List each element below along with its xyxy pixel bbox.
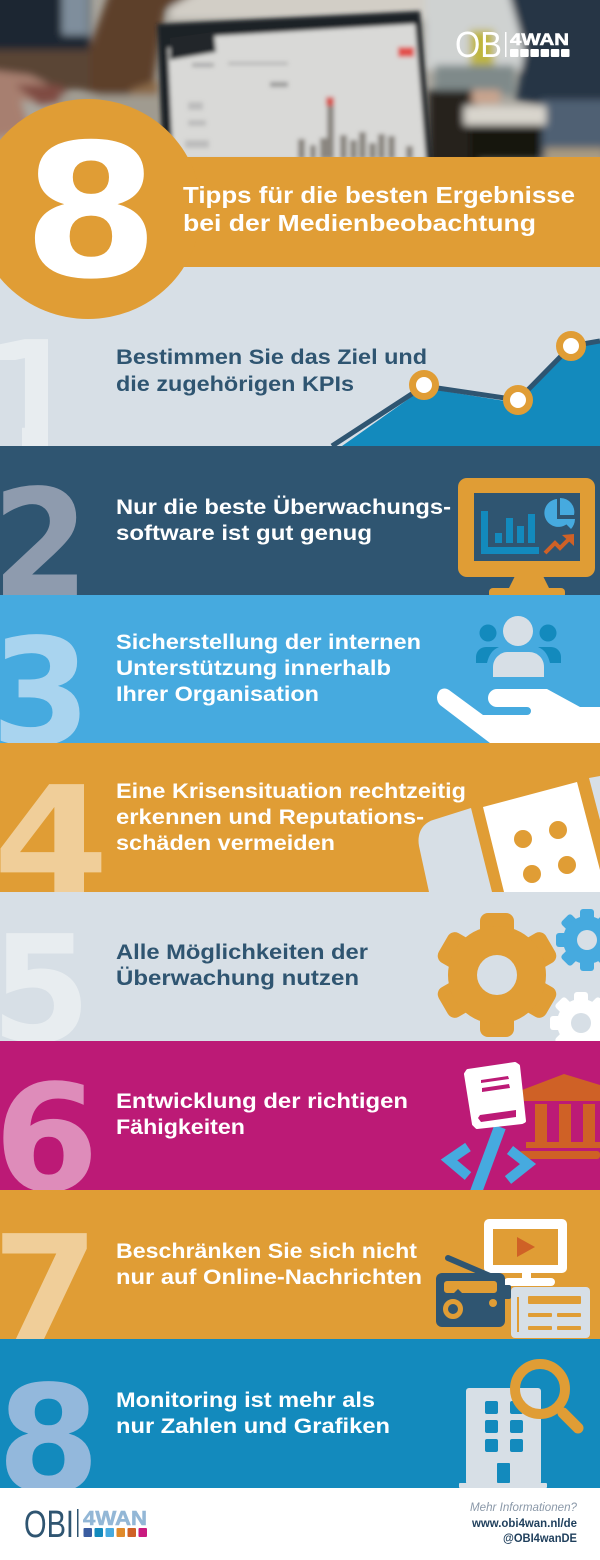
panel: step 2 — [0, 446, 600, 595]
heading: step 8: nur Zahlen und Grafiken — [116, 1415, 390, 1438]
contact text: www.obi4wan.nl/de — [471, 1518, 577, 1530]
icon: large orange gear — [435, 913, 559, 1037]
heading: step 2: software ist gut genug — [116, 522, 372, 545]
heading: step 4: Eine Krisensituation rechtzeitig — [116, 780, 466, 803]
logo: OBI4WAN white — [455, 24, 570, 65]
heading: step 8: Monitoring ist mehr als — [116, 1389, 375, 1412]
logo: OBI4WAN white: 4WAN — [510, 30, 569, 49]
panel: step 8 — [0, 1339, 600, 1488]
heading: step 4: erkennen und Reputations- — [116, 806, 424, 829]
contact text: Mehr Informationen? — [470, 1502, 578, 1514]
icon: office building — [459, 1388, 547, 1488]
big orange circle — [0, 99, 201, 319]
heading: step 6: Entwicklung der richtigen — [116, 1090, 408, 1113]
icon: bank building — [519, 1074, 600, 1159]
heading: step 3: Sicherstellung der internen — [116, 631, 421, 654]
icon: magnifying glass — [515, 1364, 578, 1428]
heading: step 6: Fähigkeiten — [116, 1116, 245, 1139]
icon: people group — [476, 616, 561, 677]
heading: step 3: Ihrer Organisation — [116, 683, 319, 706]
large numeral 8: 8 — [23, 104, 159, 320]
contact text — [470, 1502, 578, 1545]
heading: step 1: Bestimmen Sie das Ziel und — [116, 346, 427, 369]
icon: white gear — [550, 992, 600, 1041]
icon: line chart — [332, 334, 600, 446]
heading: step 5: Alle Möglichkeiten der — [116, 941, 368, 964]
panel: step 6 — [0, 1041, 600, 1190]
panel: step 7 — [0, 1190, 600, 1339]
heading: step 7: nur auf Online-Nachrichten — [116, 1266, 422, 1289]
heading: step 5: Überwachung nutzen — [116, 967, 359, 990]
icon: code brackets — [449, 1127, 528, 1192]
heading: step 4: schäden vermeiden — [116, 832, 335, 855]
heading: step 7: Beschränken Sie sich nicht — [116, 1240, 417, 1263]
icon: radio — [436, 1258, 511, 1327]
logo: OBI4WAN white: OB — [455, 24, 502, 65]
title banner — [0, 99, 600, 320]
panel: step 5 — [0, 892, 600, 1041]
title text: Tipps für die besten Ergebnisse — [183, 182, 575, 208]
logo: OBI4WAN colour — [24, 1504, 147, 1546]
icon: open hand — [437, 688, 600, 743]
icon: tilted cards with dots — [419, 776, 600, 892]
title text: bei der Medienbeobachtung — [183, 210, 536, 236]
logo: OBI4WAN colour: OBI — [24, 1504, 74, 1546]
panel: step 4 — [0, 743, 600, 892]
logo: OBI4WAN colour: 4WAN — [83, 1508, 147, 1530]
number 8: 8 — [0, 1354, 100, 1526]
icon: book — [466, 1064, 524, 1127]
heading: step 1: die zugehörigen KPIs — [116, 373, 354, 396]
heading: step 3: Unterstützung innerhalb — [116, 657, 391, 680]
panel: step 1 — [0, 267, 600, 446]
panel: footer — [0, 1488, 600, 1560]
icon: blue gear — [556, 909, 600, 971]
icon: monitor with charts — [458, 478, 595, 598]
icon: newspaper — [511, 1287, 590, 1338]
heading: step 2: Nur die beste Überwachungs- — [116, 496, 451, 519]
contact text: @OBI4wanDE — [503, 1533, 577, 1545]
header photo: blurred laptop dashboard — [0, 0, 600, 165]
panel: step 3 — [0, 595, 600, 743]
icon: screen with play button — [484, 1219, 567, 1286]
